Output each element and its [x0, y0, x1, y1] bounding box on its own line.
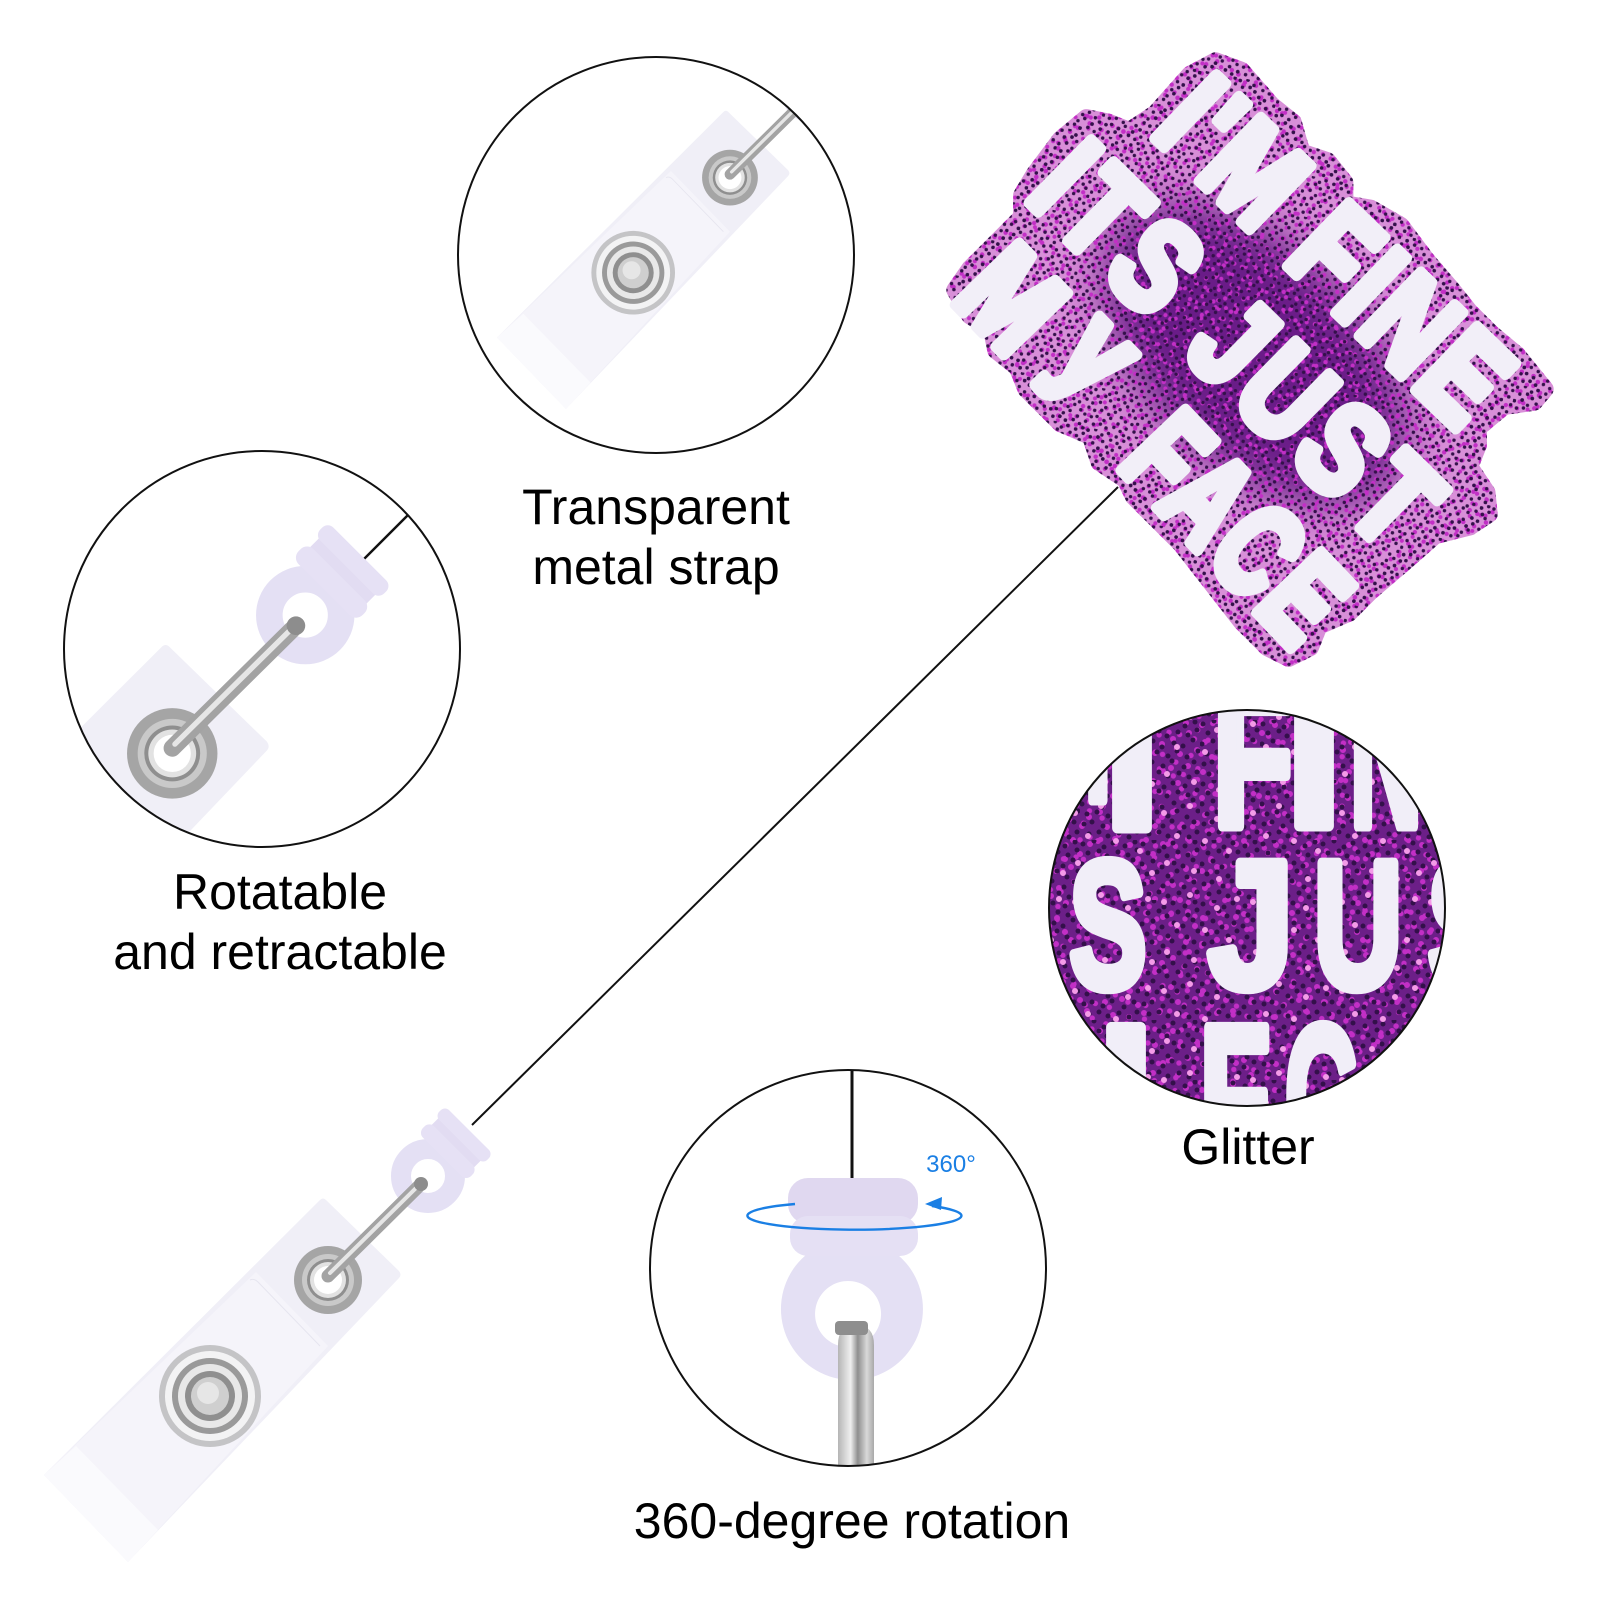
rotation arrow [747, 1197, 961, 1230]
caption: transparent metal strap: metal strap [532, 539, 780, 595]
panel: glitter close-up circle: I [1104, 648, 1160, 871]
label: 360 degrees: 360° [926, 1151, 976, 1178]
badge reel: glitter badge [930, 49, 1545, 671]
full lanyard strap with snap and stopper [44, 1106, 493, 1562]
panel: glitter close-up circle: N [1350, 645, 1422, 869]
silicone stopper [788, 1178, 918, 1256]
cord [850, 1070, 854, 1180]
retractable cord line [472, 487, 1118, 1125]
badge text [930, 49, 1540, 671]
panel: glitter close-up circle: F [1213, 645, 1293, 868]
panel: glitter close-up circle: F [1200, 984, 1270, 1208]
panel: glitter close-up circle: I [1286, 646, 1342, 869]
caption: 360-degree rotation: 360-degree rotation [634, 1493, 1070, 1549]
caption: rotatable and retractable: and retractable [113, 924, 447, 980]
silicone ring [781, 1256, 923, 1378]
badge text: ITS JUST [1004, 115, 1468, 574]
panel: glitter close-up circle: J [1208, 825, 1294, 1026]
caption: rotatable and retractable: Rotatable [173, 864, 387, 920]
panel: glitter close-up circle: M [1024, 629, 1112, 841]
caption: glitter: Glitter [1181, 1119, 1315, 1175]
panel: glitter close-up circle: S [1070, 825, 1146, 1026]
caption: transparent metal strap: Transparent [522, 479, 790, 535]
panel: 360 degree rotation circle [650, 1070, 1046, 1475]
badge text: I'M FINE [1130, 49, 1540, 452]
panel: transparent metal strap circle [458, 35, 865, 453]
panel: glitter close-up circle [1048, 709, 1446, 1107]
metal link [835, 1321, 874, 1475]
panel: glitter close-up circle: I [1098, 985, 1154, 1208]
panel: rotatable circle [63, 450, 461, 848]
panel: glitter close-up circle: S [1428, 826, 1500, 1026]
badge text: M [930, 218, 1093, 379]
badge text: y [1030, 282, 1172, 422]
panel: glitter close-up circle: U [1314, 824, 1402, 1026]
badge text: FACE [1096, 385, 1378, 671]
panel: glitter close-up circle: C [1285, 984, 1357, 1208]
